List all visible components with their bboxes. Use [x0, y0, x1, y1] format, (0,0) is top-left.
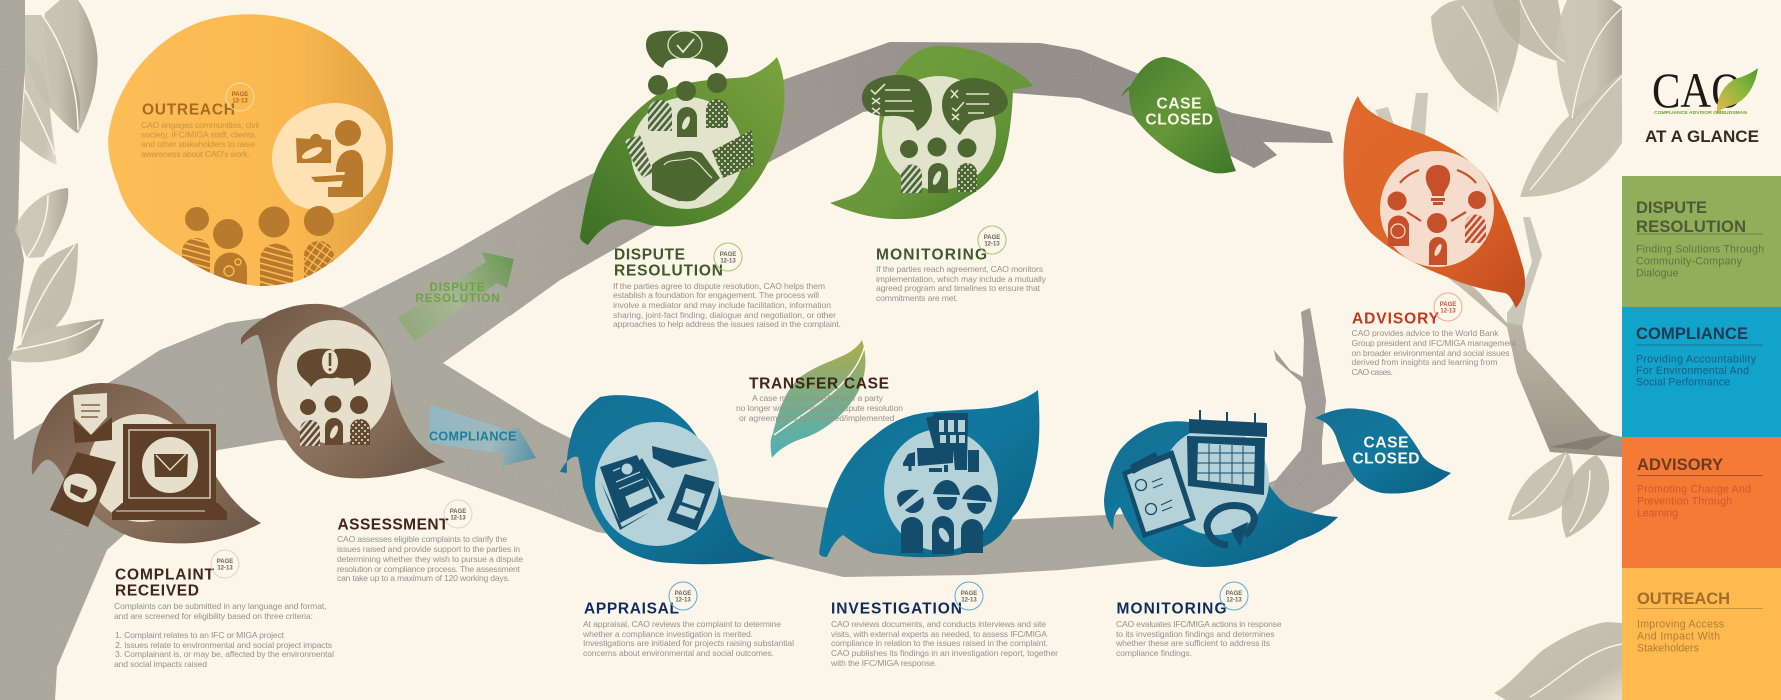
rule [1636, 344, 1763, 346]
heading: RECEIVED [115, 582, 199, 600]
leaf panel: monitoring (dispute) [830, 46, 1047, 303]
fingers [654, 180, 666, 192]
leaf [1508, 452, 1573, 520]
page badge: PAGE [450, 509, 466, 515]
sidebar: dispute resolution [1622, 176, 1781, 307]
person [213, 219, 247, 285]
description: Improving Access [1637, 618, 1724, 630]
body text [876, 264, 1047, 303]
icon: three people [900, 138, 977, 193]
tablet [667, 474, 715, 531]
leaf panel: appraisal [560, 395, 794, 658]
leaf [1494, 622, 1622, 700]
leaf panel: monitoring (compliance) [1104, 410, 1338, 658]
midrib [774, 345, 865, 435]
icon: arrows [1400, 170, 1476, 221]
body text: society, IFC/MIGA staff, clients, [141, 130, 257, 140]
body text: commitments are met. [876, 293, 958, 303]
arrow label: COMPLIANCE [429, 430, 516, 444]
body text: issues raised and provide support to the parties in [337, 544, 520, 554]
page badge: 12-13 [1440, 308, 1456, 314]
body text [736, 393, 903, 423]
arrow shape [429, 405, 536, 466]
sidebar: advisory [1622, 437, 1781, 568]
logo leaf [1717, 68, 1758, 114]
inner circle [277, 320, 391, 444]
heading: ADVISORY [1637, 456, 1723, 474]
description: And Impact With [1637, 630, 1720, 642]
description: Social Performance [1636, 376, 1730, 388]
description: Community-Company [1636, 256, 1743, 268]
panel background [1622, 176, 1781, 307]
page badge [978, 226, 1006, 254]
person [1427, 213, 1447, 265]
page badge: PAGE [675, 591, 691, 597]
body text [1115, 619, 1282, 658]
body text: agreed program and timelines to ensure that [876, 283, 1041, 293]
heading: OUTREACH [1637, 590, 1730, 608]
icon: phone [50, 452, 116, 527]
leaf [560, 395, 775, 564]
label [1352, 434, 1420, 468]
body text: If the parties agree to dispute resolution, CAO helps them [613, 281, 825, 291]
body text: CAO publishes its findings in an investigation report, together [831, 648, 1058, 658]
body text: and other stakeholders to raise [141, 139, 255, 149]
body text [613, 281, 841, 329]
label: CASE [1156, 96, 1202, 112]
body text: whether these are sufficient to address its [1115, 638, 1270, 648]
letter [73, 393, 107, 435]
page badge: 12-13 [217, 566, 233, 572]
exclamation [322, 350, 338, 374]
panel background [1622, 437, 1781, 568]
inner circle [1161, 427, 1269, 535]
body text: approaches to help address the issues raised in the complaint. [613, 319, 841, 329]
inner circle [631, 97, 743, 209]
sidebar: outreach [1622, 568, 1781, 700]
body text: resolution or compliance process. The assessment [337, 564, 521, 574]
page badge [211, 550, 239, 578]
leaf panel: assessment [241, 304, 523, 583]
leaf [44, 0, 98, 134]
inner circle [595, 422, 719, 546]
base [112, 503, 227, 520]
heading: APPRAISAL [584, 600, 679, 618]
leaf [1562, 455, 1609, 538]
inner circle [88, 414, 196, 522]
page [1187, 436, 1265, 495]
leaf: case closed blue [1315, 408, 1451, 494]
body text: A case may be transferred if a party [752, 393, 884, 403]
body text: involve a mediator and may include facilitation, information [613, 300, 831, 310]
description [1637, 484, 1751, 520]
description: For Environmental And [1636, 365, 1749, 377]
screen [123, 424, 216, 503]
inner circle [1380, 151, 1494, 267]
body text: with the IFC/MIGA response. [830, 658, 937, 668]
arrow shape [398, 252, 514, 341]
hands [652, 151, 720, 201]
leaf [771, 340, 865, 458]
page badge: 12-13 [720, 258, 736, 264]
body text: Group president and IFC/MIGA management [1352, 338, 1517, 348]
description: Providing Accountability [1636, 354, 1757, 366]
body text [1352, 328, 1517, 377]
worker [961, 485, 992, 553]
body text: CAO reviews documents, and conducts interviews and site [831, 619, 1046, 629]
person [1465, 191, 1486, 243]
body text: CAO provides advice to the World Bank [1352, 328, 1499, 338]
icon: workers [897, 480, 992, 554]
page badge: 12-13 [1226, 598, 1242, 604]
body text: CAO assesses eligible complaints to clarify the [337, 534, 507, 544]
body text: CAO evaluates IFC/MIGA actions in response [1116, 619, 1282, 629]
arrow: dispute resolution [398, 252, 514, 341]
arrow label: DISPUTE [430, 282, 485, 294]
page badge: PAGE [217, 559, 233, 565]
body text: compliance findings. [1116, 648, 1192, 658]
leaf [241, 304, 445, 478]
rule [1636, 234, 1763, 235]
leaf [1343, 96, 1525, 308]
person [304, 206, 334, 280]
person [324, 396, 343, 445]
heading: DISPUTE [1636, 199, 1707, 217]
leaf [7, 319, 104, 362]
arrow: compliance [429, 405, 536, 466]
page badge [444, 500, 472, 528]
logo: CAO [1645, 62, 1759, 146]
left cuff [625, 135, 653, 178]
arrow label [416, 282, 500, 305]
icon: laptop [112, 424, 227, 520]
page badge: 12-13 [450, 516, 466, 522]
page badge: 12-13 [984, 242, 1000, 248]
icon: handshake [625, 130, 754, 203]
heading: DISPUTE [614, 246, 685, 264]
branch: right vertical limb darker [1250, 308, 1354, 545]
heading: MONITORING [876, 246, 987, 264]
midrib highlights [15, 15, 100, 350]
person [182, 207, 210, 275]
body text [337, 534, 523, 583]
leaf shape [1315, 408, 1451, 494]
brochure [600, 455, 658, 523]
inner circle [884, 429, 998, 551]
heading [614, 246, 723, 280]
description [1636, 354, 1757, 388]
group of people [182, 206, 334, 290]
leaf [819, 390, 1039, 557]
heading: RESOLUTION [614, 262, 723, 280]
description: Stakeholders [1637, 642, 1699, 654]
leaf panel: transfer case [736, 340, 903, 458]
leaf: case closed green [1121, 57, 1236, 173]
leaf [830, 46, 1033, 219]
branch: main trunk with upper and lower limbs [0, 0, 1354, 700]
body text: 3. Complainant is, or may be, affected by the environmental [115, 649, 334, 659]
board with leaf [296, 134, 331, 163]
icon: three people [300, 396, 370, 446]
icon: clipboard [1122, 450, 1196, 538]
icon: left checklist bubble [862, 75, 932, 131]
person [648, 75, 672, 131]
panel background [1622, 307, 1781, 437]
icon: agreement bubble [646, 31, 728, 68]
body text: determining whether they wish to pursue a dispute [337, 554, 523, 564]
page badge [669, 582, 697, 610]
body text [830, 619, 1058, 668]
icon: presenter with board [296, 120, 363, 197]
label [1146, 96, 1213, 128]
leaf [1493, 0, 1569, 63]
heading: INVESTIGATION [831, 600, 962, 618]
body text: on broader environmental and social issues [1352, 348, 1510, 358]
page badge: PAGE [720, 252, 736, 258]
logo subtitle: COMPLIANCE ADVISOR OMBUDSMAN [1654, 110, 1747, 115]
heading: ADVISORY [1352, 310, 1440, 328]
leaf panel: investigation [819, 390, 1058, 668]
page badge [714, 243, 742, 271]
body text: implementation, which may include a mutually [876, 274, 1047, 284]
page badge: PAGE [1440, 302, 1456, 308]
page badge: PAGE [984, 235, 1000, 241]
label: CLOSED [1146, 112, 1213, 128]
icon: light bulb [1426, 165, 1450, 205]
body text: 2. Issues relate to environmental and social project impacts [115, 640, 332, 650]
person [957, 138, 977, 192]
envelope [73, 417, 112, 443]
factory [926, 413, 968, 470]
worker [897, 490, 924, 553]
tree: right trunk [1375, 93, 1622, 457]
page badge [955, 582, 983, 610]
leaf [15, 188, 68, 258]
arrow label: RESOLUTION [416, 293, 500, 305]
description [1636, 244, 1764, 280]
body text: and social impacts raised [114, 659, 207, 669]
blob [108, 14, 393, 286]
trunk: right tree limb [1448, 278, 1622, 457]
icon: speech bubbles [297, 349, 371, 387]
leaf [580, 57, 785, 245]
tree: trunk and branches [0, 0, 1354, 700]
right bubble [331, 349, 371, 386]
inner light blob [272, 103, 386, 213]
leaf [1556, 0, 1622, 122]
heading: OUTREACH [142, 102, 235, 118]
arm and legs [311, 165, 363, 197]
body text: Investigations are initiated for projects raising substantial [583, 638, 794, 648]
description: Prevention Through [1637, 496, 1732, 508]
icon: three people [1388, 191, 1486, 265]
leaf [20, 52, 57, 165]
leaf shape [1121, 57, 1236, 173]
logo letters: CAO [1652, 62, 1742, 118]
branch: upper limb darker [480, 42, 1333, 316]
leaf panel: dispute resolution [580, 31, 841, 329]
heading: MONITORING [1116, 600, 1226, 618]
description: Learning [1637, 508, 1678, 520]
body text: no longer wishes to pursue dispute resolution [736, 403, 903, 413]
grid [1197, 443, 1255, 486]
rule [1637, 475, 1763, 476]
page badge: 12-13 [675, 598, 691, 604]
decorative leaves: upper right [1431, 0, 1622, 197]
icon: refresh arrow [1207, 506, 1254, 547]
leaf [1104, 421, 1338, 567]
decorative leaves: left [7, 0, 104, 362]
body text: compliance in relation to the issues raised in the complaint. [831, 638, 1048, 648]
icon: three people [648, 73, 728, 137]
leaf panel: complaint received [32, 383, 334, 669]
screen circle [142, 437, 198, 493]
person [300, 399, 320, 446]
body text: CAO cases. [1352, 367, 1393, 377]
body text [114, 601, 334, 669]
body text: If the parties reach agreement, CAO monitors [876, 264, 1043, 274]
person [1388, 192, 1409, 246]
description: Finding Solutions Through [1636, 244, 1764, 256]
sidebar: compliance [1622, 307, 1781, 437]
midrib highlights [1512, 455, 1622, 697]
person [928, 138, 948, 193]
body text: derived from insights and learning from [1352, 357, 1498, 367]
page badge: 12-13 [961, 598, 977, 604]
body text [141, 120, 259, 159]
body text: At appraisal, CAO reviews the complaint to determine [583, 619, 781, 629]
leaf panel: advisory [1343, 96, 1525, 377]
body text: and are screened for eligibility based on three criteria: [114, 611, 313, 621]
page badge [1434, 293, 1462, 321]
leaf [20, 243, 78, 350]
panel background [1622, 568, 1781, 700]
heading: ASSESSMENT [338, 516, 449, 534]
page badge [226, 83, 254, 111]
body text: establish a foundation for engagement. The process will [613, 290, 819, 300]
page badge: PAGE [961, 591, 977, 597]
heading: RESOLUTION [1636, 218, 1746, 236]
body text: sharing, joint-fact finding, dialogue and negotiation, or other [613, 310, 836, 320]
leaf [25, 15, 80, 133]
person [900, 140, 922, 193]
dark band where trunk meets panel [1550, 435, 1613, 450]
page badge: 12-13 [232, 98, 248, 104]
description: Promoting Change And [1637, 484, 1751, 496]
icon: envelope and letter [73, 393, 112, 443]
envelope symbol [154, 454, 188, 477]
icon: factory and truck [903, 413, 979, 472]
torso [336, 150, 363, 188]
body text [582, 619, 794, 658]
body text: can take up to a maximum of 120 working days. [337, 573, 510, 583]
person [350, 396, 370, 445]
truck [903, 448, 953, 466]
head [335, 120, 361, 146]
body text: 1. Complaint relates to an IFC or MIGA project [115, 630, 285, 640]
icon: calendar [1187, 410, 1267, 495]
page badge: PAGE [232, 92, 248, 98]
book [652, 446, 708, 468]
body text: visits, with external experts as needed, to assess IFC/MIGA [831, 629, 1047, 639]
label: CASE [1364, 434, 1408, 452]
left bubble [297, 349, 341, 387]
person [258, 206, 293, 290]
binding [1189, 419, 1267, 437]
description [1637, 618, 1724, 654]
icon: right checklist bubble [942, 78, 1008, 135]
at a glance: AT A GLANCE [1645, 128, 1759, 146]
right cuff [712, 130, 754, 178]
label: CLOSED [1352, 450, 1420, 468]
body text: concerns about environmental and social outcomes. [583, 648, 774, 658]
heading: COMPLAINT [115, 566, 215, 584]
stem: pale twig right of advisory leaf [1507, 217, 1542, 330]
person [706, 73, 728, 128]
body text: CAO engages communities, civil [141, 120, 259, 130]
leaf [1520, 73, 1622, 197]
body text: Complaints can be submitted in any language and format, [114, 601, 326, 611]
body text: or agreement is not reached/implemented . [739, 413, 899, 423]
page badge: PAGE [1226, 591, 1242, 597]
icon: documents [600, 446, 715, 531]
midrib highlights [1462, 0, 1622, 190]
leaf [1431, 0, 1520, 113]
decorative leaves: lower right [1494, 452, 1622, 700]
panel: outreach [108, 14, 393, 290]
worker [932, 480, 960, 554]
inner circle [882, 76, 996, 190]
heading: COMPLIANCE [1636, 325, 1748, 343]
leaf [32, 383, 261, 543]
page badge [1220, 582, 1248, 610]
description: Dialogue [1636, 268, 1679, 280]
heading [115, 566, 215, 600]
heading [1636, 199, 1746, 236]
stem: pale stems behind advisory leaf [1375, 93, 1428, 140]
tank [968, 450, 979, 472]
body text: whether a compliance investigation is merited. [582, 629, 753, 639]
body text: to its investigation findings and determines [1116, 629, 1275, 639]
rule [1637, 608, 1763, 609]
heading: TRANSFER CASE [749, 376, 889, 392]
person [676, 81, 697, 137]
body text: awareness about CAO's work. [141, 149, 250, 159]
